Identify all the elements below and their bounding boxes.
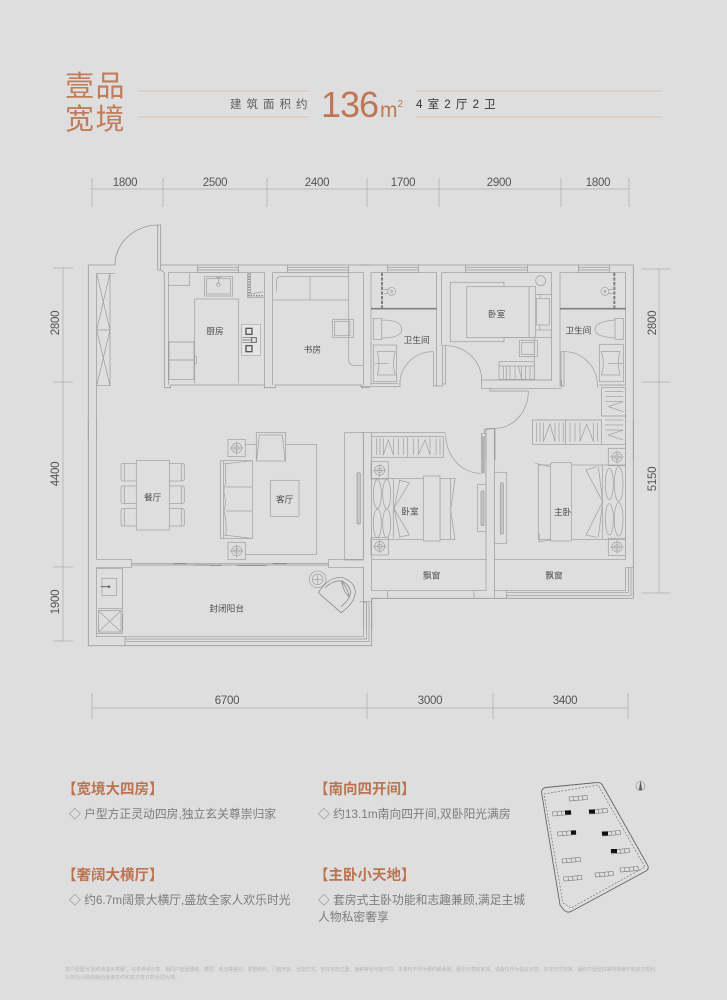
master tv	[494, 472, 507, 543]
bath two shower	[560, 273, 626, 309]
master bed	[535, 463, 626, 542]
bath two toilet	[595, 318, 623, 339]
floor plan	[88, 225, 633, 646]
north bedroom label: 卧室	[488, 308, 506, 319]
top dimensions: 2400	[305, 177, 329, 189]
master lamp bottom	[608, 538, 626, 556]
bay window label right: 飘窗	[545, 570, 563, 581]
north bedroom window	[466, 265, 528, 273]
dining label: 餐厅	[144, 492, 162, 502]
study chair	[333, 319, 353, 338]
study label: 书房	[304, 343, 321, 354]
north bedroom walls	[442, 273, 552, 380]
bath two label: 卫生间	[565, 325, 591, 336]
site plan	[542, 780, 648, 912]
entrance, kitchen and study	[88, 225, 370, 440]
entry door	[115, 225, 370, 388]
bath one walls	[360, 273, 446, 387]
title: 宽境	[65, 103, 126, 136]
balcony label: 封闭阳台	[209, 602, 244, 613]
bath two walls	[560, 273, 626, 387]
feature: four south bays: ◇ 约13.1m南向四开间,双卧阳光满房	[318, 807, 511, 821]
feature: spacious four rooms	[62, 780, 276, 821]
building area label: 建筑面积约	[230, 97, 312, 111]
side table bottom	[228, 542, 245, 560]
fridge	[169, 342, 197, 379]
bedroom label: 卧室	[401, 506, 419, 517]
washer	[98, 611, 123, 632]
master wardrobe	[532, 385, 626, 444]
left dimensions: 2800	[50, 311, 62, 335]
north bedroom chair	[519, 338, 537, 379]
bath one window	[388, 265, 418, 273]
title: 壹品	[65, 70, 126, 103]
north bedroom bed	[450, 276, 552, 342]
bottom dimensions: 3000	[418, 695, 442, 707]
top dimensions	[92, 177, 629, 207]
feature: spacious four rooms: ◇ 户型方正灵动四房,独立玄关尊崇归家	[69, 807, 276, 821]
room count: 4 室 2 厅 2 卫	[416, 97, 497, 111]
bottom dimensions: 6700	[215, 695, 239, 707]
right dimensions	[642, 269, 670, 593]
area unit: 2	[398, 99, 404, 110]
kitchen sink	[205, 277, 233, 296]
disclaimer: 本户型图为“最终改造示意图”，仅供参考示意，相同户型因楼栋、楼层、单元等差别，局部结构、门窗开启、分割方式、管井形态位置、面积等也可能不同，本资料不作为要约或承诺，图中示意的家具、设备仅作为提议示意，并非交付标准，最终户型结构等所有细节和双方权利	[65, 966, 655, 973]
feature: grand living room: 【奢阔大横厅】	[62, 867, 164, 884]
dining set	[121, 460, 184, 530]
disclaimer: 义务均以政府最后批准文件和双方签订的合同为准。	[65, 974, 180, 981]
south bedrooms	[360, 420, 633, 630]
kitchen shaft	[247, 273, 264, 297]
dining, living and balcony	[88, 420, 380, 646]
outer balcony walls	[88, 420, 380, 646]
master lamp top	[608, 448, 626, 466]
title	[65, 70, 126, 136]
header stats band	[138, 84, 662, 125]
bay window label left: 飘窗	[423, 570, 440, 581]
top dimensions: 2900	[487, 177, 511, 189]
kitchen walls	[168, 273, 363, 385]
tv cabinet	[345, 433, 363, 560]
feature: spacious four rooms: 【宽境大四房】	[62, 780, 164, 798]
feature: grand living room: ◇ 约6.7m阔景大横厅,盛放全家人欢乐时光	[69, 893, 291, 907]
left dimensions: 4400	[50, 462, 62, 486]
site inner dashed boundary	[544, 785, 645, 908]
balcony lounge chair	[318, 577, 355, 613]
kitchen counter	[168, 273, 239, 383]
right dimensions: 2800	[647, 311, 659, 335]
site outline	[542, 782, 648, 912]
bath one toilet	[373, 318, 402, 339]
feature: four south bays	[314, 781, 511, 821]
study window	[287, 265, 349, 273]
right dimensions: 5150	[647, 467, 659, 491]
bedroom lamp bottom	[371, 538, 388, 555]
bath one label: 卫生间	[404, 334, 430, 345]
feature: master suite: ◇ 套房式主卧功能和志趣兼顾,满足主城	[318, 893, 525, 907]
interior walls	[97, 420, 369, 646]
hall door	[482, 380, 562, 460]
bath one basin	[373, 345, 397, 382]
bedroom bed	[372, 476, 455, 541]
laundry sink	[97, 568, 122, 633]
balcony side table	[309, 571, 326, 588]
bottom dimensions	[92, 693, 628, 719]
coffee table	[270, 480, 299, 516]
feature: master suite: 【主卧小天地】	[314, 866, 416, 884]
bottom dimensions: 3400	[553, 695, 577, 707]
top dimensions: 1800	[586, 177, 610, 189]
armchair	[256, 433, 286, 461]
feature: master suite	[314, 866, 525, 924]
left dimensions: 1900	[50, 590, 62, 614]
study cabinet	[273, 273, 363, 365]
bedroom wardrobe	[372, 437, 443, 457]
left dimensions	[50, 268, 73, 641]
top dimensions: 1800	[113, 177, 137, 189]
kitchen label: 厨房	[206, 325, 224, 336]
bedroom door	[446, 434, 482, 473]
top dimensions: 1700	[391, 177, 415, 189]
rug	[246, 444, 317, 554]
foyer cabinet	[97, 273, 115, 440]
buildings	[552, 796, 638, 881]
top dimensions: 2500	[203, 177, 227, 189]
kitchen window	[197, 265, 239, 273]
bath two basin	[599, 344, 623, 382]
side table top	[228, 439, 245, 457]
disclaimer	[65, 966, 655, 981]
feature: grand living room	[62, 867, 291, 907]
bedroom lamp top	[371, 462, 388, 479]
master label: 主卧	[554, 506, 572, 517]
area unit: m	[380, 99, 398, 122]
bedroom tv	[478, 484, 486, 532]
bath two window	[578, 265, 609, 273]
partition walls	[360, 428, 633, 630]
feature: four south bays: 【南向四开间】	[314, 781, 416, 798]
bathrooms and north bedroom	[360, 265, 633, 460]
sofa	[220, 461, 253, 538]
bath one door	[400, 352, 433, 383]
north bedroom wardrobe	[499, 362, 534, 379]
sliding door marks	[173, 564, 287, 565]
bath two door	[564, 352, 597, 385]
bath one shower	[371, 273, 437, 309]
feature: master suite: 人物私密奢享	[318, 910, 389, 924]
stove	[242, 324, 260, 355]
compass	[636, 780, 645, 790]
living label: 客厅	[276, 494, 294, 505]
area value: 136	[321, 84, 378, 125]
